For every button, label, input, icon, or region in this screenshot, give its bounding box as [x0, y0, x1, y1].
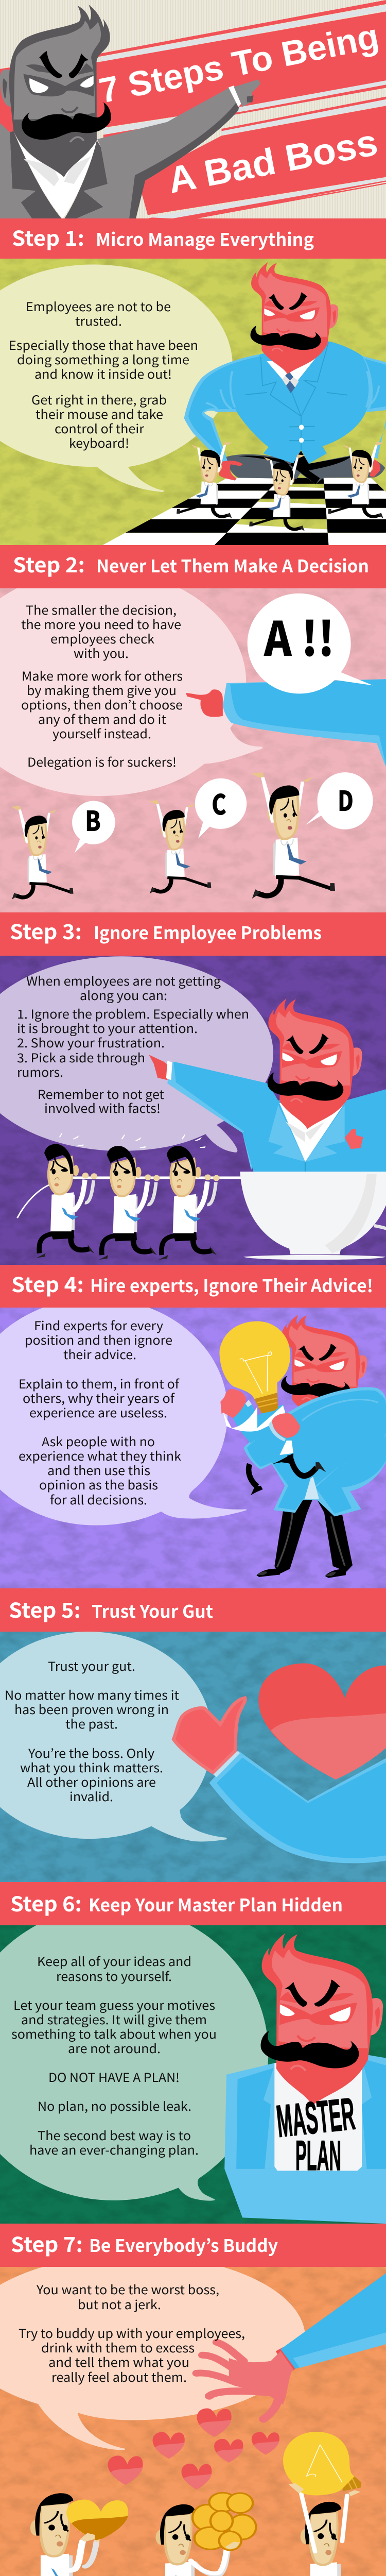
text: step 5: All other opinions are	[27, 1772, 156, 1790]
choice letters: A !!	[264, 601, 335, 670]
boss jacket	[224, 2054, 386, 2224]
panel: step 6	[0, 1906, 386, 2224]
heading: step 6: Step 6:	[10, 1888, 82, 1918]
text: step 5: Trust your gut.	[48, 1656, 135, 1674]
speech bubble	[0, 1632, 227, 1842]
speech bubble: C	[195, 778, 247, 839]
speech bubble: D	[306, 772, 373, 829]
heading: step 1: Step 1:	[12, 222, 84, 252]
panel: header	[0, 0, 386, 218]
text: step 6: DO NOT HAVE A PLAN!	[48, 2067, 180, 2086]
speech bubble	[0, 2255, 305, 2450]
golden light bulb	[283, 2432, 361, 2496]
text: step 2	[21, 600, 183, 770]
golden heart	[66, 2500, 128, 2541]
heading: step 2: Never Let Them Make A Decision	[96, 552, 369, 578]
text: step 7: but not a jerk.	[78, 2295, 161, 2313]
speech bubble	[0, 264, 233, 492]
heading: step 1	[0, 218, 386, 259]
thumbs-up hand	[173, 1698, 245, 1773]
heading: step 3	[0, 912, 386, 956]
boss body (grey)	[0, 79, 260, 218]
boss head (grey)	[0, 5, 111, 177]
text: step 4: experience are useless.	[29, 1403, 167, 1421]
back sleeve and shirt	[233, 1400, 287, 1443]
panel: step 4	[0, 1298, 386, 1589]
text: step 4: and then use this	[47, 1461, 150, 1479]
speech bubble: A	[248, 594, 373, 693]
sweat drops	[59, 1133, 205, 1148]
text: step 1: keyboard!	[69, 433, 129, 451]
speech bubble	[0, 1906, 268, 2201]
panel: step 3	[0, 956, 386, 1265]
panel: step 7	[0, 2255, 386, 2576]
heading: step 4: Step 4:	[11, 1268, 84, 1298]
text: step 1: trusted.	[75, 311, 122, 329]
big heart	[258, 1664, 386, 1780]
text: step 5: the past.	[65, 1714, 118, 1732]
text: step 3: 2. Show your frustration.	[17, 1033, 165, 1051]
text: step 6: have an ever-changing plan.	[29, 2140, 199, 2158]
heading: step 1: Micro Manage Everything	[96, 226, 314, 251]
text: step 4	[19, 1316, 181, 1508]
text: step 7: really feel about them.	[51, 2367, 187, 2385]
text: step 2: options, then don’t choose	[21, 695, 183, 713]
text: step 3: Remember to not get	[38, 1084, 164, 1103]
speech bubble: B	[72, 801, 115, 853]
text: step 1: Get right in there, grab	[31, 390, 167, 408]
boss body (blue suit)	[184, 342, 386, 484]
text: step 2: with you.	[74, 643, 129, 662]
boss hands	[220, 1389, 300, 1438]
text: step 6: reasons to yourself.	[56, 1967, 172, 1985]
choice letters: B	[85, 799, 101, 839]
text: step 6: No plan, no possible leak.	[38, 2096, 191, 2114]
text: step 2: The smaller the decision,	[26, 600, 177, 618]
text: step 5: No matter how many times it	[5, 1685, 179, 1703]
title	[96, 16, 382, 201]
boss head	[281, 1315, 367, 1423]
text: step 3: it is brought to your attention.	[17, 1019, 198, 1037]
text: step 2: by making them give you	[27, 681, 177, 699]
boss head	[251, 262, 338, 374]
text: step 5: invalid.	[69, 1787, 113, 1805]
text: step 4: their advice.	[63, 1345, 136, 1363]
left thin arm	[249, 1464, 257, 1487]
suit torso	[243, 1387, 386, 1516]
text: step 6: The second best way is to	[38, 2126, 191, 2144]
heading: step 7: Be Everybody’s Buddy	[89, 2232, 278, 2257]
text: step 4: Find experts for every	[34, 1316, 164, 1334]
text: step 3: 3. Pick a side through	[17, 1048, 145, 1066]
employees pulling	[37, 1144, 220, 1260]
text: step 1: and know it inside out!	[34, 364, 172, 382]
text: step 4: Explain to them, in front of	[19, 1374, 180, 1392]
employee hands	[80, 2483, 361, 2549]
coffee cup	[240, 1172, 386, 1260]
heading: step 7	[0, 2224, 386, 2267]
title: 7 Steps To Being	[96, 16, 382, 111]
text: step 4: opinion as the basis	[39, 1475, 158, 1493]
text: step 6: Let your team guess your motives	[13, 1995, 215, 2013]
text: step 6: something to talk about when you	[11, 2024, 217, 2042]
boss legs	[256, 1500, 353, 1578]
text: step 5: You’re the boss. Only	[28, 1743, 155, 1761]
text: step 2: Make more work for others	[22, 666, 183, 684]
text: step 1: their mouse and take	[36, 404, 163, 422]
heading: step 6	[0, 1882, 386, 1925]
light bulb	[219, 1321, 290, 1413]
speech bubble	[0, 1298, 247, 1526]
choice letters: C	[212, 782, 226, 823]
text: step 6: are not around.	[68, 2039, 161, 2057]
text: step 7: You want to be the worst boss,	[36, 2280, 219, 2298]
text: step 1: control of their	[55, 419, 145, 437]
heading: step 3: Ignore Employee Problems	[94, 919, 322, 944]
text: step 1: Especially those that have been	[9, 335, 198, 353]
text: step 2: yourself instead.	[52, 724, 151, 742]
text: step 2: Delegation is for suckers!	[27, 752, 177, 770]
heading: step 6: Keep Your Master Plan Hidden	[89, 1891, 343, 1917]
heading: step 4: Hire experts, Ignore Their Advice!	[90, 1272, 373, 1297]
boss head	[260, 1933, 383, 2106]
heading: step 5: Trust Your Gut	[92, 1598, 213, 1623]
text: step 2: the more you need to have	[21, 615, 181, 633]
choice letters: D	[338, 778, 354, 819]
reaching arm	[276, 2273, 386, 2373]
text: step 6	[11, 1952, 217, 2158]
panel: step 5	[0, 1632, 386, 1883]
speech bubble	[0, 956, 273, 1153]
text: step 4: Ask people with no	[42, 1432, 155, 1450]
text: step 2: any of them and do it	[38, 709, 166, 727]
text: step 3: along you can:	[80, 986, 167, 1004]
text: step 4: experience what they think	[19, 1446, 181, 1464]
golden brain	[192, 2493, 256, 2550]
text: step 5: has been proven wrong in	[14, 1700, 169, 1718]
text: step 3: rumors.	[17, 1062, 63, 1080]
falling hearts	[108, 2409, 279, 2489]
choice letters	[85, 601, 354, 839]
boss suit	[149, 1055, 386, 1172]
master plan lettering	[274, 2088, 357, 2179]
text: step 4: for all decisions.	[50, 1490, 147, 1508]
boss sleeve	[209, 1750, 386, 1863]
text: step 6: Keep all of your ideas and	[37, 1952, 191, 1970]
title: A Bad Boss	[165, 122, 381, 201]
panel: step 2	[0, 569, 386, 913]
panel: step 1	[0, 259, 386, 546]
heading: step 2	[0, 545, 386, 588]
heading: step 7: Step 7:	[11, 2228, 83, 2258]
boss sleeve and pointing hand	[186, 679, 386, 767]
text: step 3: When employees are not getting	[26, 971, 221, 989]
boss body with light bulb	[219, 1321, 386, 1578]
chessboard floor	[102, 478, 386, 545]
text: step 3	[17, 971, 249, 1116]
employee arms	[48, 2492, 347, 2575]
text: step 3: 1. Ignore the problem. Especially when	[17, 1004, 249, 1022]
text: step 5: what you think matters.	[20, 1758, 163, 1776]
text: step 4: position and then ignore	[25, 1330, 172, 1348]
heading: step 2: Step 2:	[13, 549, 85, 579]
text: step 7: Try to buddy up with your employees,	[19, 2324, 245, 2342]
text: step 2: employees check	[50, 629, 154, 647]
heading: step 4	[0, 1265, 386, 1308]
text: step 1	[9, 297, 198, 451]
heading: step 5	[0, 1588, 386, 1632]
text: step 1: Employees are not to be	[26, 297, 171, 315]
employees carrying things	[14, 2493, 358, 2576]
employees with arms raised	[177, 442, 384, 531]
text: step 7: drink with them to excess	[41, 2338, 195, 2356]
boss head	[268, 998, 362, 1129]
text: step 4: others, why their years of	[23, 1388, 175, 1406]
text: step 7: and tell them what you	[48, 2352, 189, 2370]
text: step 1: doing something a long time	[17, 350, 189, 368]
text: step 3: involved with facts!	[44, 1098, 161, 1116]
heading: step 3: Step 3:	[10, 916, 82, 945]
heading: step 5: Step 5:	[9, 1594, 81, 1624]
text: step 7	[19, 2280, 245, 2385]
hand dropping hearts	[197, 2342, 293, 2419]
employees	[11, 772, 335, 900]
text: step 5	[5, 1656, 179, 1805]
pole	[17, 1176, 241, 1218]
speech bubble	[0, 569, 262, 796]
text: step 6: and strategies. It will give them	[21, 2010, 207, 2028]
